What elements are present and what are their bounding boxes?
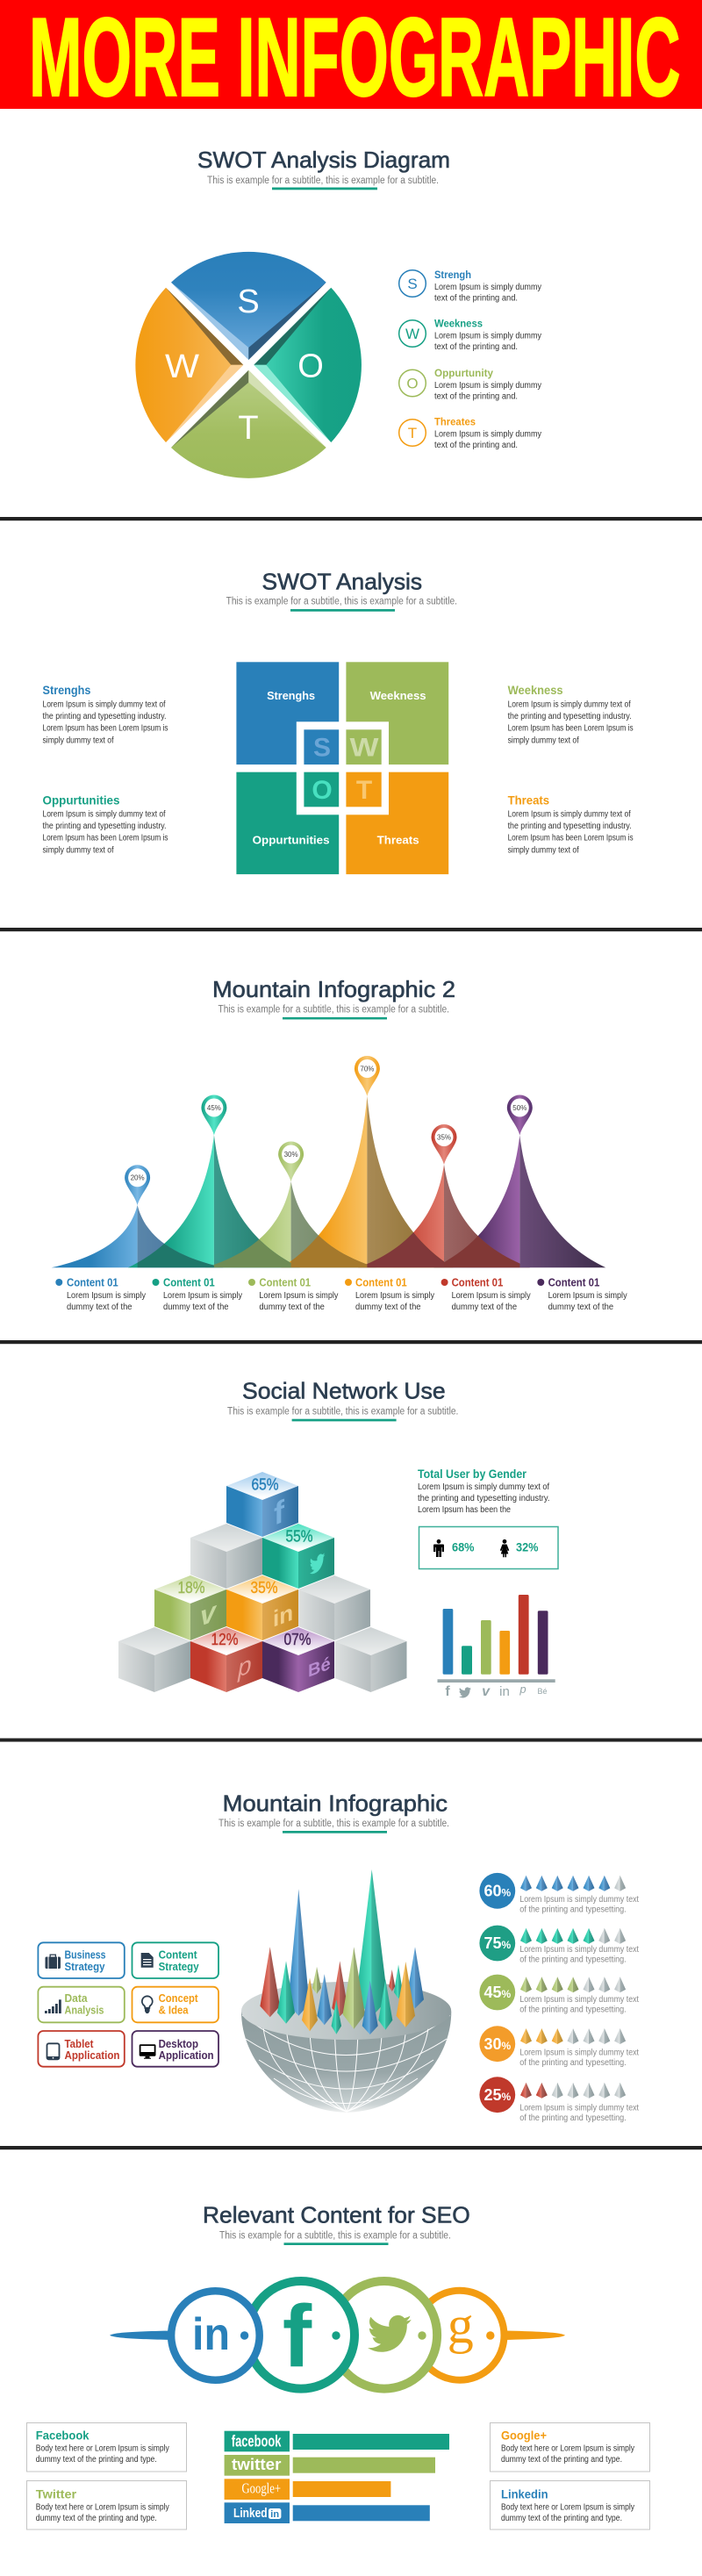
SWOT square matrix: Weekness [370,689,426,702]
panel: relevant content for SEO [26,2202,649,2529]
legend: Oppurtunity: Lorem Ipsum is simply dummy [434,381,541,391]
panel: SWOT analysis diagram [135,147,541,478]
legend item 5: Content 01 [452,1276,503,1289]
legend: Strength: text of the printing and. [434,293,518,304]
ring: facebook: f [283,2287,312,2386]
legend item 3: dummy text of the [259,1302,325,1312]
text block: Strenghs: simply dummy text of [42,736,114,746]
bar row: facebook [225,2431,449,2451]
card: Content Strategy [132,1942,218,1978]
stat row: 45%: Lorem Ipsum is simply dummy text [519,1995,639,2005]
card: Facebook: Body text here or Lorem Ipsum is simply [36,2444,169,2454]
legend: Oppurtunity: text of the printing and. [434,391,518,402]
pin: 50% [507,1095,533,1136]
legend: Weekness: Lorem Ipsum is simply dummy [434,332,541,341]
text block: Weekness: Lorem Ipsum has been Lorem Ipsum is [508,724,634,734]
heading: Relevant Content for SEO: Relevant Content for SEO [203,2202,470,2228]
pie diagram [135,252,362,478]
card: Twitter: dummy text of the printing and type. [36,2514,157,2523]
ring: twitter [332,2281,437,2389]
isometric cube pyramid [118,1472,407,1692]
legend item 1: dummy text of the [67,1302,133,1312]
heading: SWOT Analysis Diagram: SWOT Analysis Diagram [197,147,450,173]
legend: Weekness: Weekness [434,318,483,330]
legend item 5 [441,1276,531,1312]
stat row: 45%: 45% [484,1984,511,2001]
stat row: 30%: of the printing and typesetting. [519,2058,627,2068]
SWOT square matrix: T [356,776,372,805]
bar chart axis icons: p [519,1683,526,1696]
card: Desktop Application: Desktop [159,2037,198,2050]
icon: desktop [140,2044,156,2059]
panel: SWOT analysis [42,569,634,874]
legend item 5: Lorem Ipsum is simply [452,1291,531,1301]
legend item 6 [537,1276,627,1312]
bowl [241,1982,451,2113]
ring: linkedin [171,2291,260,2380]
text block: Weekness [508,683,634,746]
card: Concept & Idea [132,1987,218,2022]
icon: man [433,1539,444,1557]
panel: mountain infographic [38,1790,639,2123]
heading: SWOT Analysis: This is example for a subtitle, this is example for a subtitle. [226,597,457,607]
text block: total user by gender: Total User by Gender [418,1467,526,1481]
card: Twitter [26,2480,186,2529]
pin: 35% [432,1124,456,1165]
text block: Strenghs: Lorem Ipsum is simply dummy text of [42,700,166,709]
spindle left [110,2331,171,2340]
cube: facebook [226,1472,298,1537]
text block: Oppurtunities: Lorem Ipsum has been Lorem Ipsum is [42,834,168,843]
card: Linkedin: dummy text of the printing and type. [501,2514,622,2523]
pin: 70% [355,1056,380,1096]
heading: Mountain Infographic [218,1790,449,1833]
card: Google+ [490,2422,649,2472]
legend: Oppurtunity: Oppurtunity [434,367,493,379]
pin: 30% [278,1141,304,1181]
cube percentages: 65% [251,1476,279,1494]
stat row: 75% [479,1926,639,1964]
cube: linkedin [226,1575,298,1640]
card: Business Strategy: Strategy [65,1960,105,1973]
card: Business Strategy [38,1942,125,1978]
icon: signal bars [45,1999,61,2013]
heading: SWOT Analysis Diagram [197,147,450,190]
legend: Threates: Lorem Ipsum is simply dummy [434,430,541,439]
legend item 4: Content 01 [355,1276,407,1289]
pin: 70%: 70% [360,1065,374,1073]
cube percentages: 55% [286,1528,312,1546]
heading: Relevant Content for SEO [203,2202,470,2245]
legend item 3: Lorem Ipsum is simply [259,1291,338,1301]
hemisphere with spikes [241,1869,451,2113]
ring: facebook [247,2281,355,2389]
card: Desktop Application [132,2031,218,2067]
pin: 30%: 30% [284,1151,298,1159]
cube icons: v [200,1596,217,1633]
card: Desktop Application: Application [159,2049,214,2062]
legend: Weekness: W [405,326,419,342]
legend: Oppurtunity: O [406,376,419,391]
icon: woman [500,1539,509,1557]
cube icons [200,1492,331,1683]
stat row: 30% [479,2026,639,2068]
bar row: twitter: twitter [232,2456,281,2473]
bar row: Google+: Google+ [242,2480,281,2497]
gender box [419,1527,558,1569]
legend item 1 [55,1276,146,1312]
legend item 1: Lorem Ipsum is simply [67,1291,146,1301]
heading: SWOT Analysis [226,569,457,612]
bar chart [437,1595,555,1699]
cube: grey row 4 left [118,1627,190,1692]
stat row: 25%: Lorem Ipsum is simply dummy text [519,2104,639,2113]
banner [0,0,702,119]
card: Concept & Idea: & Idea [159,2003,189,2016]
stat row: 75%: Lorem Ipsum is simply dummy text [519,1945,639,1955]
heading: SWOT Analysis Diagram: This is example for a subtitle, this is example for a subtitle. [207,176,439,186]
SWOT square matrix: Threats [377,834,419,847]
stat row: 30%: 30% [484,2035,511,2053]
cube: grey row 4 right [335,1627,407,1692]
cube: grey row 3 [298,1575,370,1640]
segment: T [171,370,326,478]
heading: SWOT Analysis: SWOT Analysis [261,569,422,595]
SWOT square matrix [236,662,448,874]
legend item 4: Lorem Ipsum is simply [355,1291,434,1301]
text block: Weekness: the printing and typesetting industry. [508,712,632,721]
text block: Threats: Lorem Ipsum has been Lorem Ipsum is [508,834,634,843]
card: Facebook [26,2422,186,2472]
legend item 1: Content 01 [67,1276,118,1289]
cube icons: Bé [308,1654,331,1682]
text block: Strenghs: the printing and typesetting industry. [42,712,167,721]
cube percentages: 35% [251,1579,277,1597]
stat row: 60%: 60% [484,1882,511,1899]
card: Google+: dummy text of the printing and type. [501,2455,622,2465]
card: Tablet Application: Tablet [65,2037,94,2050]
text block: Threats: Lorem Ipsum is simply dummy text of [508,809,631,819]
panel: mountain infographic 2 [52,976,627,1312]
social rings [110,2281,565,2389]
stat row: 75%: of the printing and typesetting. [519,1955,627,1964]
card: Concept & Idea: Concept [159,1991,198,2005]
legend: Threates: Threates [434,416,476,428]
card: Data Analysis [38,1987,125,2022]
heading: Relevant Content for SEO: This is example for a subtitle, this is example for a subtitle. [219,2230,451,2241]
icon: briefcase [46,1954,61,1969]
cube percentages: 12% [211,1631,239,1648]
card: Content Strategy: Strategy [159,1960,199,1973]
card: Linkedin: Body text here or Lorem Ipsum is simply [501,2503,634,2513]
bar chart axis icons: in [499,1684,510,1699]
legend item 2: Content 01 [163,1276,215,1289]
card: Google+: Body text here or Lorem Ipsum is simply [501,2444,634,2454]
SWOT square matrix: Strenghs [267,689,315,702]
stat row: 45%: of the printing and typesetting. [519,2005,627,2014]
cube icons: in [273,1599,293,1632]
ring: google: g [448,2296,474,2354]
stat row: 60%: of the printing and typesetting. [519,1905,627,1914]
bar chart axis icons: Bé [537,1687,548,1696]
legend: Strength: Lorem Ipsum is simply dummy [434,283,541,292]
text block: total user by gender [418,1467,549,1515]
stat row: 30%: Lorem Ipsum is simply dummy text [519,2049,639,2058]
card: Facebook: Facebook [36,2429,90,2443]
heading: Social Network Use: This is example for a subtitle, this is example for a subtitle. [227,1406,458,1417]
heading: Mountain Infographic 2: Mountain Infographic 2 [212,976,455,1002]
stat row: 45% [479,1975,639,2014]
SWOT square matrix: O [312,776,333,805]
text block: total user by gender: the printing and typesetting industry. [418,1494,549,1503]
pin: 35%: 35% [437,1133,451,1141]
cube icons: p [237,1651,252,1683]
bar row: LinkedIn [225,2502,430,2523]
legend item 4: dummy text of the [355,1302,421,1312]
pin: 45%: 45% [207,1104,221,1112]
cube percentages: 18% [177,1579,205,1597]
stat row: 60% [479,1873,639,1914]
legend item 6: Content 01 [548,1276,599,1289]
heading: Mountain Infographic 2: This is example for a subtitle, this is example for a subtitle. [218,1005,449,1015]
card: Google+: Google+ [501,2429,547,2443]
SWOT square matrix: S [313,734,331,763]
card: Tablet Application [38,2031,125,2067]
stat row: 75%: 75% [484,1934,511,1952]
legend: Strength: Strengh [434,269,471,281]
text block: total user by gender: Lorem Ipsum has been the [418,1505,511,1515]
text block: Oppurtunities: Oppurtunities [42,793,120,807]
segment: W: W [165,348,199,385]
legend: Strength [399,269,541,304]
legend item 3: Content 01 [259,1276,311,1289]
card: Twitter: Twitter [36,2487,77,2501]
legend: Weekness: text of the printing and. [434,342,518,352]
bar chart axis icons [445,1683,548,1699]
segment: O [254,288,362,442]
legend: Threates [399,416,541,450]
bar chart axis icons: v [482,1684,491,1699]
card: Linkedin: Linkedin [501,2487,548,2501]
ring: linkedin: in [192,2309,230,2360]
heading: Mountain Infographic 2 [212,976,455,1020]
legend item 4 [345,1276,434,1312]
heading: Mountain Infographic: Mountain Infographic [223,1790,448,1816]
text block: Oppurtunities: Lorem Ipsum is simply dummy text of [42,809,166,819]
segment: S: S [237,283,260,320]
cube percentages: 07% [284,1631,311,1648]
card: Tablet Application: Application [65,2049,120,2062]
bar row: LinkedIn: Linked [233,2506,268,2521]
segment: T: T [238,410,259,447]
bar chart axis icons: f [445,1684,450,1699]
text block: Strenghs: Strenghs [42,683,91,697]
text block: Oppurtunities: simply dummy text of [42,846,114,856]
card: Linkedin [490,2480,649,2529]
pin: 20% [125,1165,150,1205]
card: Data Analysis: Analysis [65,2003,104,2016]
bar row: twitter [225,2455,435,2476]
text block: Threats: the printing and typesetting industry. [508,822,632,831]
cube: grey row 2 [190,1524,262,1589]
pin: 45% [201,1095,226,1136]
icon: document [141,1953,154,1968]
gender box: 68% [452,1539,475,1553]
SWOT square matrix: Oppurtunities [253,834,330,847]
mountain chart [52,1096,605,1267]
cube: behance [262,1627,334,1692]
text block: Oppurtunities: the printing and typesetting industry. [42,822,167,831]
segment: S [171,252,326,360]
heading: Social Network Use: Social Network Use [242,1378,446,1404]
stat row: 60%: Lorem Ipsum is simply dummy text [519,1895,639,1905]
text block: Threats: simply dummy text of [508,846,579,856]
card: Twitter: Body text here or Lorem Ipsum is simply [36,2503,169,2513]
spindle right [505,2331,565,2340]
text block: Threats [508,793,634,856]
card: Data Analysis: Data [65,1991,88,2005]
text block: Weekness: simply dummy text of [508,736,579,746]
cube: twitter [262,1524,334,1589]
heading: Social Network Use [227,1378,458,1421]
legend item 3 [248,1276,338,1312]
text block: Strenghs [42,683,168,746]
segment: O: O [297,348,324,384]
legend: Threates: T [408,425,417,441]
pin: 50%: 50% [512,1104,526,1112]
ring: google [416,2291,504,2380]
panel: social network use [118,1378,558,1699]
text block: Threats: Threats [508,793,549,807]
stat row: 25%: of the printing and typesetting. [519,2113,627,2123]
text block: Oppurtunities [42,793,168,856]
legend item 5: dummy text of the [452,1302,518,1312]
text block: Weekness: Weekness [508,683,563,697]
legend: Strength: S [407,276,418,292]
legend: Weekness [399,318,541,352]
legend: Oppurtunity [399,367,541,402]
pin: 20%: 20% [131,1174,145,1182]
text block: Strenghs: Lorem Ipsum has been Lorem Ipsum is [42,724,168,734]
text block: total user by gender: Lorem Ipsum is simply dummy text of [418,1482,549,1492]
gender box: 32% [516,1539,539,1553]
cube icons: f [274,1492,285,1532]
bar row: facebook: facebook [232,2432,282,2450]
legend item 2: Lorem Ipsum is simply [163,1291,242,1301]
legend item 2: dummy text of the [163,1302,229,1312]
card: Facebook: dummy text of the printing and type. [36,2455,157,2465]
cube: vimeo [154,1575,226,1640]
SWOT square matrix: W [349,734,379,763]
stat row: 25% [479,2077,639,2123]
legend item 6: Lorem Ipsum is simply [548,1291,627,1301]
legend item 2 [153,1276,242,1312]
icon: light bulb [142,1996,153,2013]
bar row: LinkedIn: in [270,2509,279,2520]
cube: pinterest [190,1627,262,1692]
bar row: Google+ [225,2479,390,2500]
legend item 6: dummy text of the [548,1302,614,1312]
icon: tablet [47,2043,60,2059]
segment: W [135,288,243,442]
card: Content Strategy: Content [159,1948,197,1962]
cube percentages [177,1476,312,1648]
text block: Weekness: Lorem Ipsum is simply dummy text of [508,700,631,709]
stat row: 25%: 25% [484,2086,511,2104]
card: Business Strategy: Business [65,1948,105,1962]
heading: Mountain Infographic: This is example for a subtitle, this is example for a subtitle. [218,1819,449,1829]
legend: Threates: text of the printing and. [434,441,518,450]
spikes [260,1869,424,2034]
